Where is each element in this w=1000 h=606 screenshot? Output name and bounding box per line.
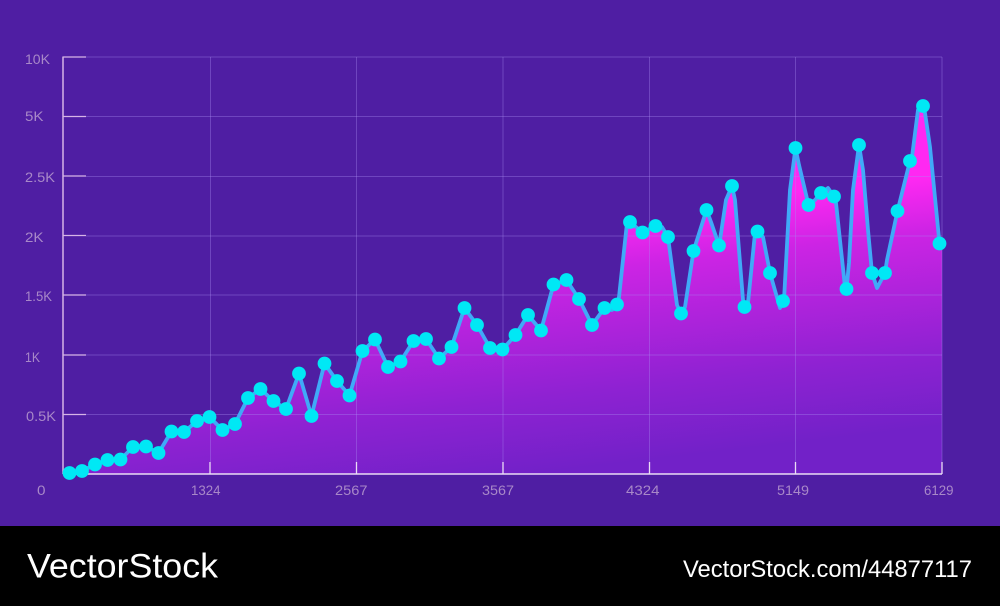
x axis labels: 4324: [626, 482, 660, 498]
y axis labels: 2K: [25, 229, 44, 245]
y axis labels: 10K: [25, 51, 51, 67]
x axis labels: [37, 482, 954, 498]
y axis labels: 0.5K: [26, 408, 57, 424]
y axis labels: [25, 51, 57, 424]
footer band: [0, 526, 1000, 606]
grid lines: [86, 57, 942, 462]
x axis labels: 3567: [482, 482, 514, 498]
y axis labels: 1K: [25, 349, 41, 365]
x axis labels: 5149: [777, 482, 809, 498]
y axis labels: 1.5K: [25, 288, 53, 304]
x axis labels: 1324: [191, 482, 221, 498]
y axis labels: 2.5K: [25, 169, 56, 185]
data line: [70, 106, 940, 473]
y axis labels: 5K: [25, 108, 44, 124]
area fill: [70, 106, 942, 474]
footer logo: VectorStock: [27, 548, 219, 586]
data points: [63, 99, 946, 480]
x axis: [63, 462, 942, 474]
y axis: [63, 56, 86, 474]
x axis labels: 6129: [924, 482, 954, 498]
x axis labels: 2567: [335, 482, 368, 498]
footer image id: VectorStock.com/44877117: [683, 557, 972, 583]
x axis labels: 0: [37, 482, 46, 498]
